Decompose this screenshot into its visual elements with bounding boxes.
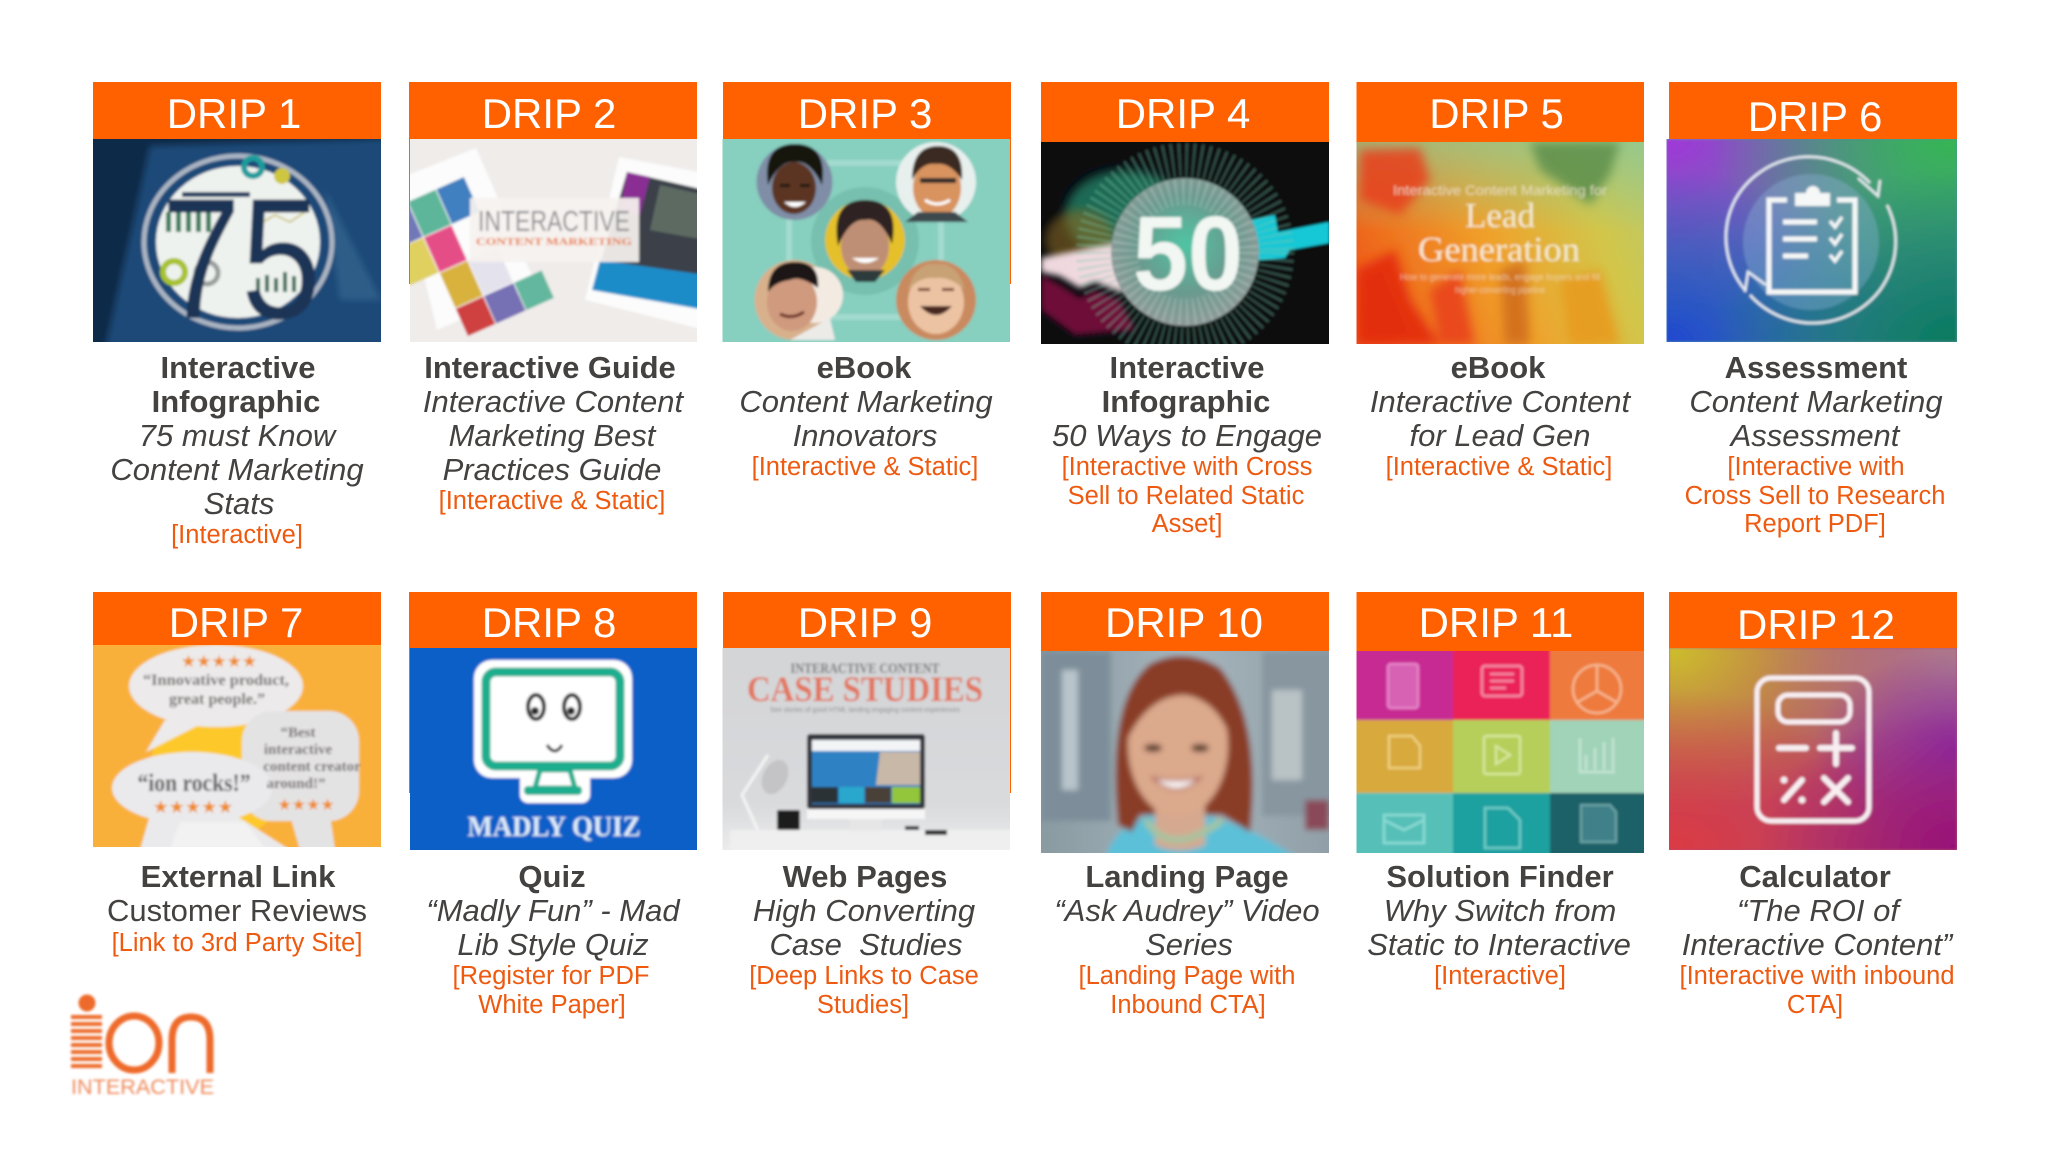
image: lead generation ebook cover: Generation	[1418, 230, 1580, 269]
description: drip 6: [Interactive with	[1727, 453, 1905, 481]
description: drip 4: Asset]	[1152, 510, 1222, 538]
description: drip 8	[426, 859, 681, 1019]
description: drip 11	[1367, 859, 1631, 990]
header: DRIP 8	[409, 592, 697, 793]
header: DRIP 5	[1356, 82, 1644, 142]
portrait: fifth innovator	[896, 260, 976, 340]
header: DRIP 4: DRIP 4	[1116, 90, 1250, 137]
panel: drip 12	[1660, 592, 1965, 1019]
panel: drip 7	[85, 592, 389, 957]
header: DRIP 1: DRIP 1	[167, 90, 301, 137]
header: DRIP 9	[723, 592, 1011, 793]
description: drip 10: “Ask Audrey” Video	[1054, 893, 1320, 928]
description: drip 2: [Interactive & Static]	[439, 487, 665, 515]
description: drip 10	[1054, 859, 1320, 1019]
image: customer review speech bubbles: great people.”	[169, 691, 265, 708]
description: drip 2	[423, 350, 684, 515]
description: drip 1: Infographic	[152, 384, 320, 419]
description: drip 8: [Register for PDF	[453, 962, 649, 990]
panel: drip 8	[400, 592, 705, 1019]
image: customer review speech bubbles: “Innovative product,	[143, 672, 289, 689]
image: customer review speech bubbles: content creator	[263, 759, 361, 775]
description: drip 11: [Interactive]	[1434, 962, 1566, 990]
description: drip 5: Interactive Content	[1370, 384, 1631, 419]
description: drip 12: “The ROI of	[1737, 893, 1902, 928]
image: customer review speech bubbles: “Best	[280, 725, 316, 741]
description: drip 6: Assessment	[1729, 418, 1901, 453]
image: lead generation ebook cover: Lead	[1465, 196, 1535, 235]
header: DRIP 7	[93, 592, 381, 793]
panel: drip 10	[1030, 592, 1340, 1019]
image: customer review speech bubbles: interactive	[264, 742, 332, 758]
image: content type tile grid	[1350, 645, 1650, 859]
image: calculator icon	[1669, 648, 1957, 850]
panel: drip 5	[1346, 82, 1654, 481]
description: drip 7: [Link to 3rd Party Site]	[112, 929, 362, 957]
description: drip 2: Marketing Best	[449, 418, 657, 453]
image: lead generation ebook cover	[1356, 142, 1644, 344]
image: madly quiz monitor	[410, 648, 697, 850]
description: drip 9: Studies]	[817, 991, 909, 1019]
image: 50 ways burst	[1041, 142, 1329, 344]
panel: drip 9	[712, 592, 1020, 1019]
image: case studies desk scene: INTERACTIVE CONTENT	[790, 661, 940, 677]
description: drip 9: High Converting	[753, 893, 975, 928]
description: drip 3: [Interactive & Static]	[752, 453, 978, 481]
logo: ion interactive	[71, 994, 214, 1099]
image: 75 stats infographic: 75	[161, 163, 321, 355]
description: drip 12: Interactive Content”	[1682, 927, 1954, 962]
image: case studies desk scene	[722, 648, 1010, 850]
header: DRIP 12	[1669, 592, 1957, 648]
header: DRIP 8: DRIP 8	[482, 599, 616, 646]
image: lead generation ebook cover: Interactive Content Marketing for	[1393, 182, 1607, 198]
image: customer review speech bubbles: ★★★★	[277, 795, 335, 814]
description: drip 8: Lib Style Quiz	[457, 927, 649, 962]
header: DRIP 11	[1356, 592, 1644, 651]
header: DRIP 5: DRIP 5	[1429, 90, 1564, 137]
description: drip 2: Practices Guide	[443, 452, 661, 487]
image: customer review speech bubbles: “ion rocks!”	[138, 770, 250, 797]
description: drip 10: [Landing Page with	[1079, 962, 1295, 990]
image: interactive guide tablets	[410, 139, 697, 342]
description: drip 4: Infographic	[1102, 384, 1270, 419]
description: drip 1: [Interactive]	[171, 521, 303, 549]
description: drip 3: eBook	[817, 350, 912, 385]
logo wordmark: INTERACTIVE: INTERACTIVE	[71, 1076, 214, 1099]
description: drip 1: Content Marketing	[110, 452, 364, 487]
header: DRIP 7: DRIP 7	[169, 599, 303, 646]
description: drip 6: Cross Sell to Research	[1685, 482, 1945, 510]
description: drip 5: [Interactive & Static]	[1386, 453, 1612, 481]
header: DRIP 11: DRIP 11	[1419, 599, 1573, 646]
image: lead generation ebook cover: How to generate more leads, engage buyers and fill	[1400, 272, 1600, 282]
header: DRIP 6: DRIP 6	[1748, 93, 1882, 140]
image: clipboard assessment icon	[1666, 139, 1957, 342]
description: drip 10: Series	[1145, 927, 1233, 962]
description: drip 4: Interactive	[1109, 350, 1265, 385]
description: drip 6: Content Marketing	[1689, 384, 1943, 419]
description: drip 12: CTA]	[1787, 991, 1843, 1019]
description: drip 3: Innovators	[793, 418, 937, 453]
panel: drip 11	[1350, 592, 1650, 990]
portrait: third innovator	[825, 200, 905, 282]
image: five innovator portraits	[722, 139, 1010, 342]
description: drip 1: Interactive	[160, 350, 316, 385]
header: DRIP 2	[409, 82, 697, 284]
description: drip 5	[1370, 350, 1631, 481]
image: customer review speech bubbles: ★★★★★	[181, 652, 257, 672]
description: drip 7: External Link	[141, 859, 336, 894]
description: drip 12: [Interactive with inbound	[1680, 962, 1954, 990]
description: drip 12: Calculator	[1739, 859, 1891, 894]
image: interactive guide tablets: CONTENT MARKETING	[476, 236, 633, 248]
description: drip 12	[1680, 859, 1954, 1019]
description: drip 1	[110, 350, 364, 549]
header: DRIP 1	[93, 82, 381, 139]
description: drip 5: eBook	[1451, 350, 1546, 385]
description: drip 9	[749, 859, 979, 1019]
description: drip 11: Solution Finder	[1386, 859, 1614, 894]
description: drip 4: Sell to Related Static	[1068, 482, 1305, 510]
header: DRIP 3: DRIP 3	[798, 90, 932, 137]
header: DRIP 10	[1041, 592, 1329, 651]
panel: drip 3	[712, 82, 1020, 481]
description: drip 8: “Madly Fun” - Mad	[426, 893, 681, 928]
image: lead generation ebook cover: higher-converting pipeline	[1455, 285, 1545, 295]
image: case studies desk scene: CASE STUDIES	[747, 669, 983, 709]
description: drip 8: Quiz	[518, 859, 586, 894]
description: drip 7	[107, 859, 367, 957]
image: Audrey portrait photo	[1041, 651, 1329, 853]
image: interactive guide tablets: INTERACTIVE	[478, 206, 630, 238]
description: drip 11: Why Switch from	[1384, 893, 1616, 928]
description: drip 6: Assessment	[1725, 350, 1907, 385]
description: drip 1: 75 must Know	[139, 418, 338, 453]
description: drip 10: Inbound CTA]	[1110, 991, 1266, 1019]
description: drip 3	[739, 350, 993, 481]
image: madly quiz monitor: MADLY QUIZ	[468, 812, 640, 843]
header: DRIP 3	[723, 82, 1011, 284]
header: DRIP 4	[1041, 82, 1329, 142]
description: drip 4	[1052, 350, 1322, 538]
image: customer review speech bubbles: around!”	[267, 776, 325, 792]
description: drip 7: Customer Reviews	[107, 893, 367, 928]
description: drip 9: [Deep Links to Case	[749, 962, 979, 990]
image: 75 stats infographic	[93, 139, 381, 342]
panel: drip 4	[1030, 82, 1340, 538]
portrait: second innovator	[896, 142, 976, 222]
image: case studies desk scene: See stories of good HTML landing engaging content experiences	[770, 707, 960, 714]
image: customer review speech bubbles	[93, 645, 381, 847]
logo mark: spring letter i	[71, 994, 102, 1068]
description: drip 8: White Paper]	[478, 991, 626, 1019]
description: drip 9: Web Pages	[783, 859, 947, 894]
description: drip 6	[1685, 350, 1945, 538]
portrait: fourth innovator	[754, 260, 843, 340]
description: drip 2: Interactive Content	[423, 384, 684, 419]
logo wordmark: on	[109, 1016, 210, 1073]
description: drip 5: for Lead Gen	[1410, 418, 1590, 453]
header: DRIP 9: DRIP 9	[798, 599, 932, 646]
panel: drip 2	[409, 82, 697, 514]
header: DRIP 12: DRIP 12	[1737, 601, 1895, 648]
description: drip 2: Interactive Guide	[424, 350, 676, 385]
panel: drip 6	[1660, 82, 1965, 538]
description: drip 9: Case Studies	[770, 927, 962, 962]
header: DRIP 2: DRIP 2	[482, 90, 616, 137]
portrait: first innovator	[756, 144, 832, 220]
header: DRIP 6	[1669, 82, 1957, 140]
description: drip 11: Static to Interactive	[1367, 927, 1631, 962]
description: drip 1: Stats	[204, 486, 274, 521]
image: 50 ways burst: 50	[1133, 195, 1243, 313]
image: customer review speech bubbles: ★★★★★	[153, 797, 233, 818]
description: drip 4: [Interactive with Cross	[1062, 453, 1312, 481]
description: drip 6: Report PDF]	[1744, 510, 1886, 538]
description: drip 4: 50 Ways to Engage	[1052, 418, 1322, 453]
header: DRIP 10: DRIP 10	[1105, 599, 1263, 646]
panel: drip 1	[85, 82, 390, 549]
description: drip 10: Landing Page	[1085, 859, 1289, 894]
description: drip 3: Content Marketing	[739, 384, 993, 419]
